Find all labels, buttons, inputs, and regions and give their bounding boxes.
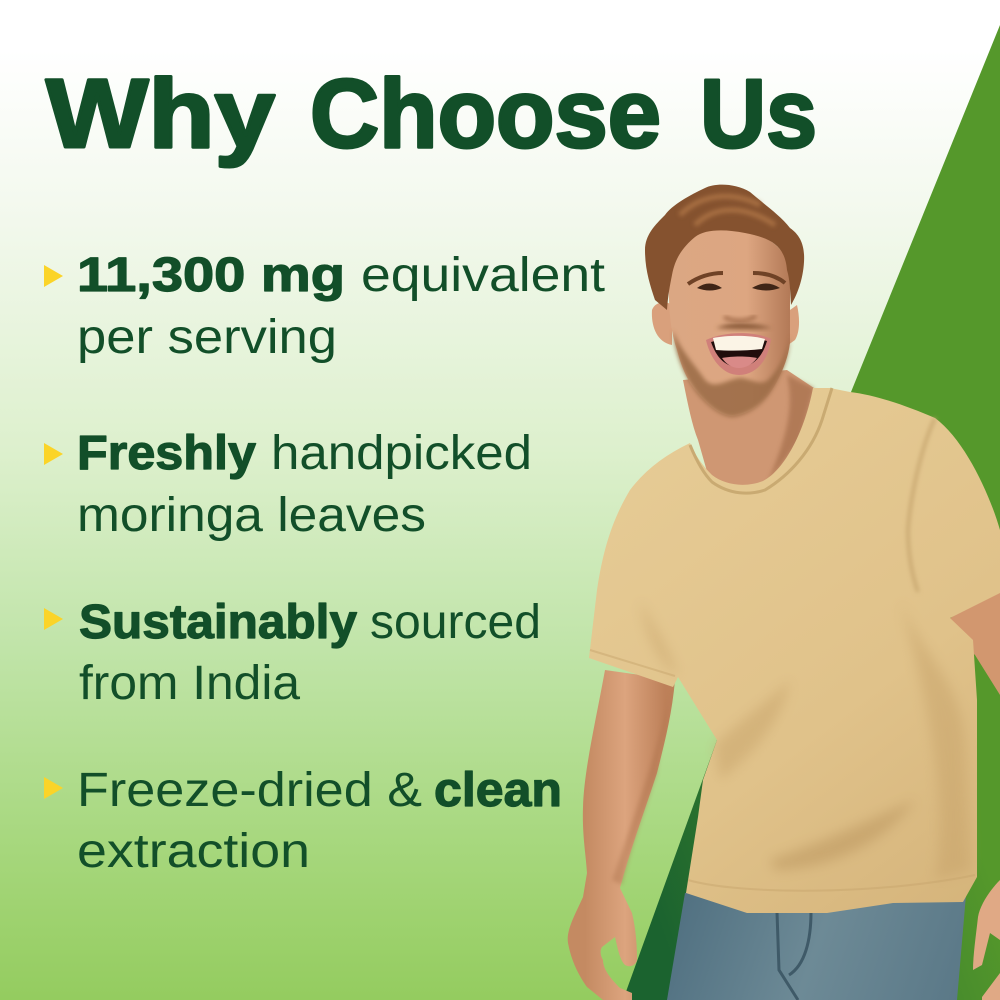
bullet 1: per serving bbox=[77, 311, 337, 364]
right sleeve seam bbox=[908, 418, 935, 592]
beard stubble bbox=[673, 330, 790, 417]
lips bbox=[706, 333, 771, 375]
man in t-shirt bbox=[568, 185, 1000, 1000]
bullet 4: extraction bbox=[77, 825, 310, 878]
moustache and nose shadow bbox=[716, 323, 772, 330]
left arm and hand bbox=[568, 670, 675, 1000]
eyes bbox=[697, 284, 780, 290]
title bbox=[46, 59, 817, 168]
face bbox=[669, 228, 790, 416]
diagonal green panel bbox=[623, 25, 1000, 1000]
bullet 2: moringa leaves bbox=[77, 489, 426, 542]
bullet 2 bbox=[44, 427, 532, 542]
ears bbox=[652, 302, 799, 345]
bullet 1 bbox=[44, 249, 605, 364]
mouth interior bbox=[711, 338, 767, 367]
bullet 2: Freshly bbox=[77, 427, 256, 480]
forearm shading bbox=[612, 690, 672, 885]
eyebrows bbox=[688, 273, 785, 284]
title: Us bbox=[700, 59, 817, 168]
hem lines bbox=[590, 650, 975, 891]
shirt wrinkles bbox=[640, 600, 970, 880]
teeth bbox=[713, 336, 765, 351]
hair highlights bbox=[680, 196, 775, 225]
bullet 3: Sustainably bbox=[79, 596, 357, 649]
bullet 1: 11,300 mg bbox=[77, 249, 345, 302]
title: Why bbox=[46, 59, 275, 168]
bullet 4 bbox=[44, 764, 562, 878]
bullet 1: equivalent bbox=[361, 249, 605, 302]
hair bbox=[645, 185, 804, 310]
bullet 4: Freeze-dried & bbox=[77, 764, 422, 817]
t-shirt bbox=[589, 388, 1000, 913]
bullet 3: from India bbox=[79, 657, 300, 710]
jeans bbox=[667, 893, 966, 1000]
bullet 3: sourced bbox=[370, 596, 541, 649]
right hand bbox=[973, 880, 1000, 1000]
bullet 2: handpicked bbox=[271, 427, 532, 480]
neck shadow bbox=[768, 375, 814, 482]
jeans fly bbox=[777, 912, 811, 1000]
bullet 3 bbox=[44, 596, 541, 710]
bullet 4: clean bbox=[434, 764, 562, 817]
tongue bbox=[722, 356, 757, 368]
neck bbox=[683, 370, 814, 490]
collar bbox=[690, 388, 832, 493]
title: Choose bbox=[310, 59, 661, 168]
right arm bbox=[940, 585, 1000, 695]
